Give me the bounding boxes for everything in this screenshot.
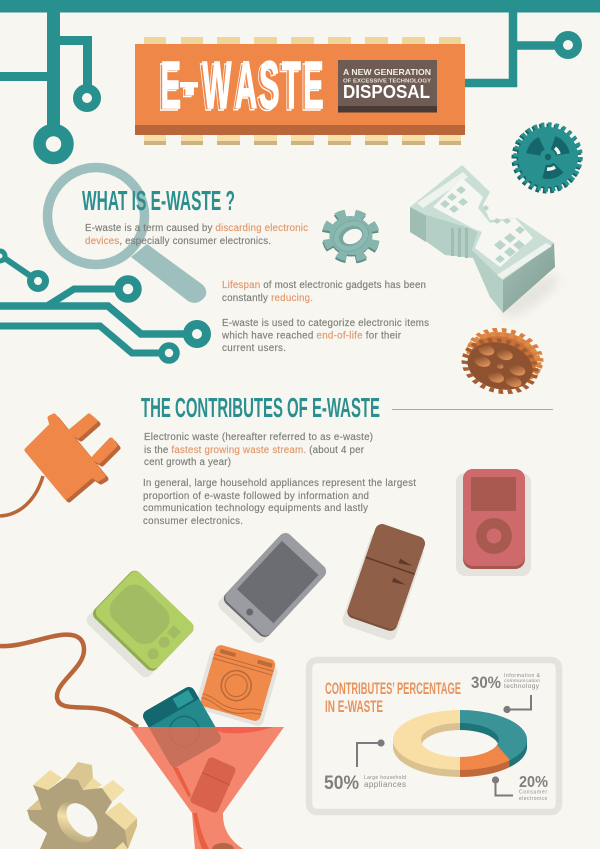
chart title: CONTRIBUTES’ PERCENTAGE (325, 679, 461, 698)
circuit: top right traces (465, 12, 578, 83)
text block: lifespan: Lifespan of most electronic gadgets has been (222, 280, 426, 291)
cable into funnel (0, 635, 138, 727)
subtitle box: DISPOSAL (343, 82, 430, 102)
heading: the contributes of e-waste: THE CONTRIBUTES OF E-WASTE (141, 392, 380, 423)
label: 50%: appliances (364, 780, 406, 789)
text block: end of life: current users. (222, 343, 286, 354)
label: 20%: electronics (519, 796, 548, 802)
icon: plug and cable (0, 416, 118, 516)
icon: grey-green gear (323, 209, 379, 264)
text block: definition: devices, especially consumer electronics. (85, 236, 271, 247)
text block: proportions: consumer electronics. (143, 516, 243, 527)
label: 30%: Information & (504, 673, 541, 679)
label: 30%: communication (504, 678, 540, 684)
text block: fastest growing: cent growth a year) (144, 457, 231, 468)
text block: lifespan (222, 280, 426, 304)
icon: teal gear (514, 125, 580, 190)
icon: beige gear (27, 762, 137, 849)
icon: copper gear (459, 323, 546, 399)
chart title: IN E-WASTE (325, 697, 383, 716)
subtitle box: OF EXCESSIVE TECHNOLOGY (343, 78, 431, 84)
text block: lifespan: constantly reducing. (222, 293, 313, 304)
text block: proportions (143, 478, 416, 527)
panel: contributes percentage (309, 660, 559, 812)
text block: fastest growing: is the fastest growing waste stream. (about 4 per (144, 445, 365, 456)
text block: end of life (221, 318, 429, 354)
label: 30%: technology (504, 683, 540, 690)
text block: end of life: which have reached end-of-life for their (221, 330, 402, 342)
chip pins (144, 37, 461, 145)
title chip (135, 37, 465, 145)
circuit: top bar (0, 0, 600, 12)
text block: fastest growing: Electronic waste (hereafter referred to as e-waste) (144, 432, 373, 443)
subtitle box (338, 60, 437, 112)
icon: washing machine (194, 643, 280, 727)
label: 20%: Consumer (519, 790, 547, 796)
heading: E-WASTE: E-WASTE (161, 49, 324, 123)
label: 50%: Large household (364, 775, 406, 781)
heading: E-WASTE: E-WASTE (158, 51, 321, 125)
icon: tablet (216, 530, 329, 646)
label: 20% (492, 774, 548, 802)
icon: isometric pixel cursor (410, 165, 564, 324)
circuit: top left traces (0, 12, 96, 158)
icon: magnifying glass (48, 168, 206, 303)
label: 30% (471, 673, 541, 713)
chip body (135, 44, 465, 135)
icon: fridge (341, 522, 429, 642)
label: 30%: 30% (471, 673, 501, 692)
text block: proportions: proportion of e-waste followed by information and (143, 491, 369, 502)
circuit: middle left traces (0, 251, 206, 360)
text block: proportions: In general, large household appliances represent the largest (143, 478, 416, 489)
text block: proportions: communication technology equipments and lastly (143, 503, 368, 514)
label: 20%: 20% (519, 774, 548, 791)
text block: definition: E-waste is a term caused by discarding electronic (85, 223, 308, 234)
text block: definition (85, 223, 308, 247)
label: 50% (324, 739, 406, 794)
subtitle box: A NEW GENERATION (343, 68, 431, 77)
icon: funnel (130, 727, 284, 849)
icon: mp3 player (456, 469, 531, 576)
icon: teal appliance (141, 685, 223, 769)
icon: television (84, 568, 196, 680)
text block: fastest growing (144, 432, 373, 468)
label: 50%: 50% (324, 772, 359, 794)
heading: what is e-waste: WHAT IS E-WASTE ? (82, 185, 235, 216)
chart title (325, 679, 461, 716)
donut chart (393, 710, 527, 777)
text block: end of life: E-waste is used to categorize electronic items (222, 318, 429, 329)
